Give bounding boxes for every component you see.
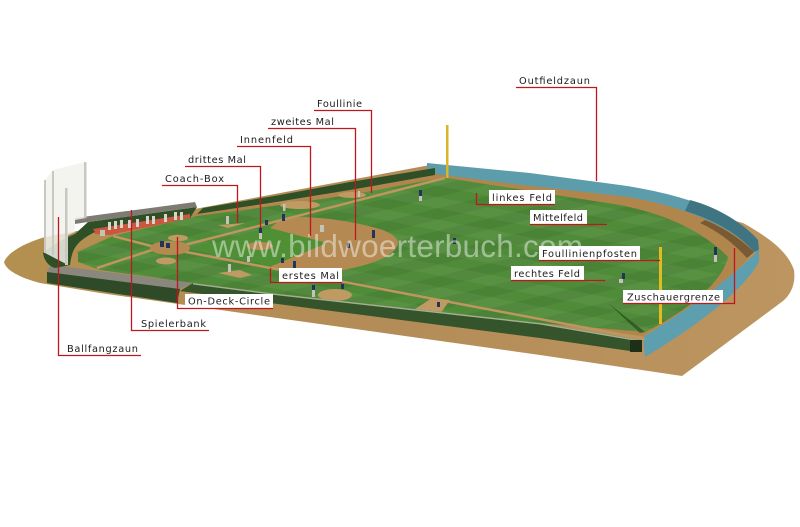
label: Zuschauergrenze: Zuschauergrenze — [627, 292, 720, 304]
label: On-Deck-Circle: On-Deck-Circle — [188, 296, 270, 308]
stadium ground — [4, 165, 794, 376]
pitcher's mound — [247, 242, 273, 250]
foul and base lines — [97, 178, 645, 339]
label: rechtes Feld: rechtes Feld — [514, 269, 580, 280]
label: Coach-Box: Coach-Box — [165, 174, 224, 185]
label: erstes Mal — [270, 268, 342, 282]
label: Mittelfeld: Mittelfeld — [533, 213, 583, 224]
left wall — [43, 222, 95, 268]
label: zweites Mal: zweites Mal — [271, 117, 334, 128]
label: On-Deck-Circle — [178, 237, 273, 308]
label: linkes Feld — [476, 190, 555, 204]
on-deck circles and coach boxes — [156, 192, 450, 314]
foul pole right — [659, 247, 662, 324]
label: Outfieldzaun — [516, 76, 596, 181]
dark track edge — [700, 220, 754, 258]
foul pole left — [446, 125, 448, 178]
outfield wall — [427, 163, 759, 357]
label: Ballfangzaun: Ballfangzaun — [67, 344, 138, 355]
label: Ballfangzaun — [58, 217, 141, 356]
label: rechtes Feld — [511, 266, 605, 280]
label: Coach-Box — [162, 174, 238, 223]
players — [100, 190, 717, 307]
label: zweites Mal — [268, 117, 356, 240]
label: Spielerbank: Spielerbank — [141, 319, 206, 330]
label: Foullinienpfosten — [539, 246, 660, 260]
infield dirt — [270, 217, 398, 273]
label: Foullinie: Foullinie — [317, 99, 362, 110]
warning track — [75, 174, 754, 336]
backstop net: Ballfangzaun — [44, 162, 86, 265]
watermark: www.bildwoerterbuch.com — [211, 228, 583, 264]
label: linkes Feld: linkes Feld — [492, 193, 552, 204]
label: erstes Mal: erstes Mal — [282, 271, 339, 282]
label: Innenfeld: Innenfeld — [240, 135, 293, 146]
label: drittes Mal: drittes Mal — [188, 155, 246, 166]
home plate area — [150, 241, 190, 255]
grass field — [78, 178, 728, 332]
pole shadow — [608, 303, 645, 333]
label: drittes Mal — [185, 155, 260, 228]
label: Mittelfeld — [530, 210, 607, 224]
label: Innenfeld — [237, 135, 310, 236]
infield grass — [190, 228, 327, 266]
label: Foullinienpfosten: Foullinienpfosten — [542, 249, 637, 260]
back wall — [197, 168, 435, 214]
dugout far: Spielerbank — [75, 202, 197, 235]
label: Spielerbank — [132, 210, 209, 330]
front wall — [180, 283, 642, 352]
label: Outfieldzaun: Outfieldzaun — [519, 76, 590, 87]
dugout near — [47, 266, 193, 303]
label: Zuschauergrenze — [623, 248, 734, 304]
label: Foullinie — [314, 99, 372, 193]
